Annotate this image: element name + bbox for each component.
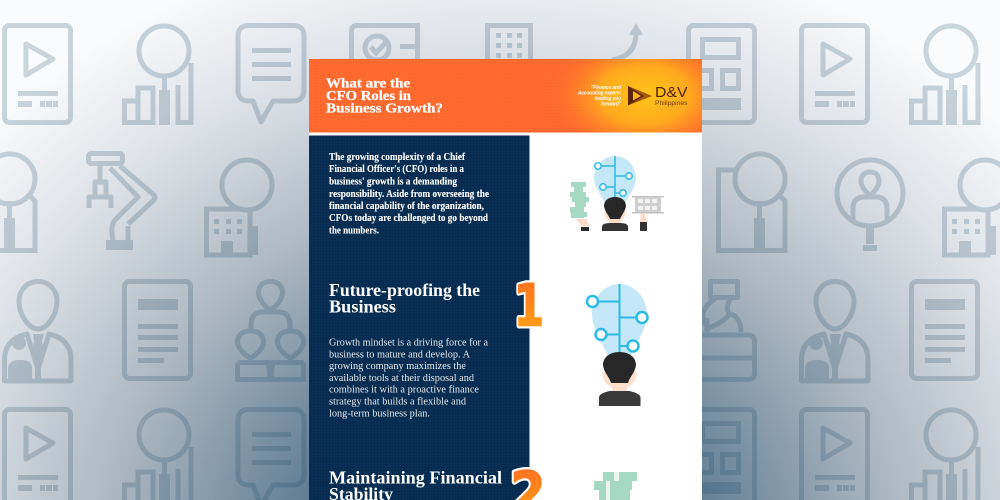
tagline (577, 85, 622, 108)
icon: person with tie left (4, 282, 71, 381)
bulb (594, 156, 636, 208)
icon: video document right row 4 (802, 410, 868, 500)
illustration: money stack section 2 (594, 472, 637, 500)
icon: video document row 4 (4, 410, 70, 500)
money stack (570, 182, 589, 218)
panel: infographic sheet (309, 59, 702, 500)
intro text: The growing complexity of a Chief (329, 152, 466, 163)
body text: section 1: combines it with a proactive finance (329, 384, 479, 396)
heading: Maintaining Financial Stability (329, 468, 502, 500)
icon: people group with book (238, 282, 304, 380)
tagline: Accounting experts (577, 90, 621, 96)
icon: person with tie right (802, 282, 868, 381)
heading: Future-proofing the Business: Business (329, 297, 396, 317)
icon: report document (124, 282, 190, 378)
body text: section 1: available tools at their disposal and (329, 373, 475, 384)
hand and cuff left (576, 219, 590, 226)
icon: robot arm (88, 154, 155, 250)
tagline: forward" (601, 102, 622, 108)
icon: speech bubble row 4 (238, 410, 304, 500)
icon: magnifier building right (944, 160, 1000, 255)
icon: growth arrow (612, 23, 643, 60)
icon: magnifier document right (718, 154, 785, 253)
intro text: Financial Officer's (CFO) roles in a (329, 164, 464, 175)
icon: building (488, 26, 530, 70)
icon: layout panel row 1 (688, 26, 754, 122)
title: What are the (326, 76, 410, 90)
title: CFO Roles in (326, 88, 412, 103)
number 1: 1 (514, 273, 544, 340)
title (326, 76, 443, 116)
icon: video document right row 1 (802, 26, 868, 122)
icon: magnifier chart row 4 (124, 410, 191, 500)
body text: section 1: Growth mindset is a driving force for a (329, 338, 488, 348)
logo: D&V Philippines: D&V (655, 84, 688, 101)
heading: Future-proofing the Business (329, 280, 480, 317)
icon: person magnifier (837, 160, 903, 251)
heading: Maintaining Financial Stability: Maintaining Financial (329, 468, 502, 488)
intro text: responsibility. Aside from overseeing the (329, 189, 490, 200)
logo: D&V Philippines (628, 84, 688, 107)
head and shoulders (609, 220, 621, 225)
hand and cuff right (640, 213, 647, 222)
title: Business Growth? (326, 100, 443, 116)
icon: hand on stack (700, 282, 754, 380)
body text: section 1: business to mature and develop. A (329, 350, 470, 360)
panel: navy text column (309, 136, 530, 500)
icon: magnifier building left (206, 160, 272, 255)
icon: layout panel row 4 (688, 410, 754, 500)
intro text: CFOs today are challenged to go beyond (329, 213, 488, 224)
illustration: head with idea bulb (587, 284, 648, 406)
logo: D&V Philippines: Philippines (655, 100, 688, 107)
icon: speech bubble row 1 (238, 26, 304, 122)
intro text (329, 152, 490, 236)
intro text: business' growth is a demanding (329, 176, 457, 188)
number 1: 1 (514, 273, 544, 340)
heading: Future-proofing the Business: Future-proofing the (329, 280, 480, 300)
icon: video document row 1 (4, 26, 70, 122)
icon: magnifier document left (0, 154, 35, 253)
icon: magnifier chart row 1 (124, 26, 191, 125)
building panel (632, 196, 664, 214)
icon: check document (352, 26, 420, 70)
tagline: leading you (595, 96, 621, 102)
icon: magnifier chart right row 4 (912, 410, 978, 500)
illustration: thinking CFO with money and building (570, 156, 664, 231)
icon: report document right (912, 282, 978, 378)
body text: section 1: strategy that builds a flexible and (329, 396, 467, 408)
icon: magnifier chart right row 1 (912, 26, 978, 125)
body text: section 1 (329, 338, 488, 420)
panel: orange header (309, 59, 702, 132)
body text: section 1: long-term business plan. (329, 408, 430, 420)
body text: section 1: growing company maximizes the (329, 361, 466, 372)
intro text: financial capability of the organization, (329, 201, 484, 212)
intro text: the numbers. (329, 226, 379, 236)
tagline: "Finance and (591, 85, 622, 91)
